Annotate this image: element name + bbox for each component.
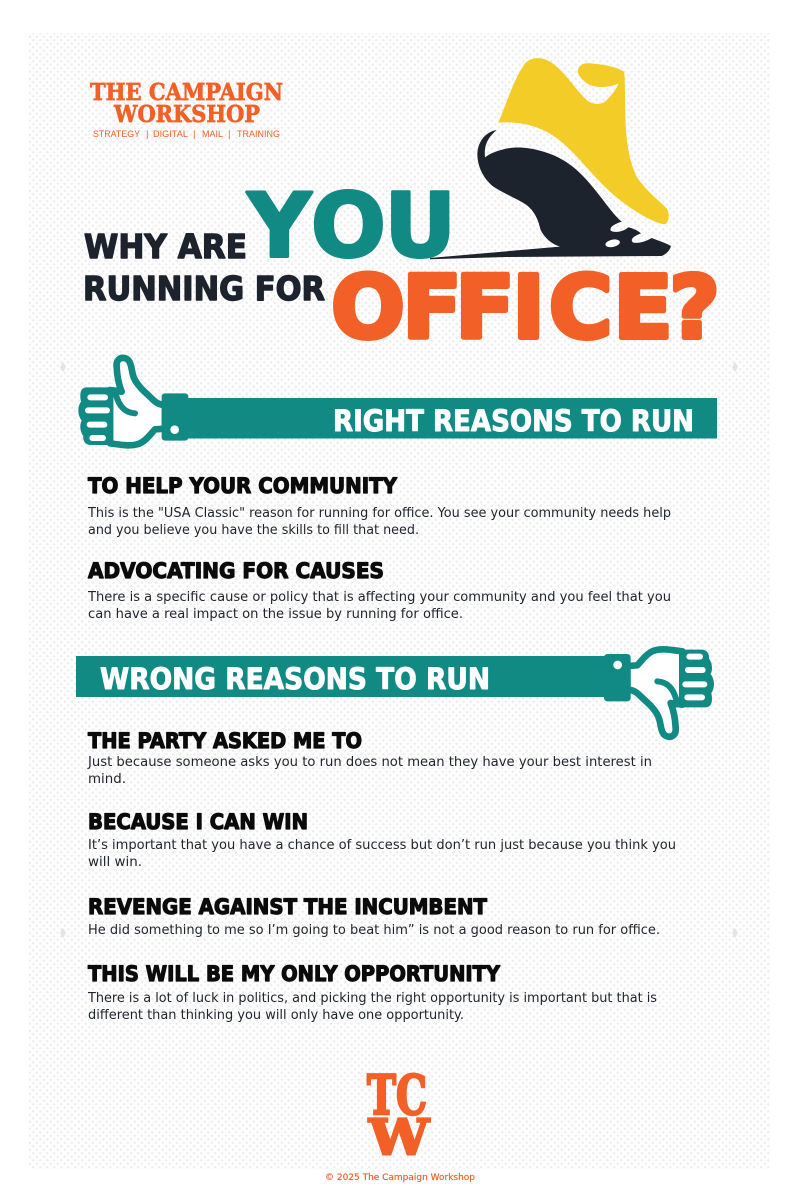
reason: advocating: There is a specific cause or policy that is affecting your community and you feel that you	[87, 590, 671, 605]
icon: running shoe	[430, 58, 671, 259]
reason: advocating: can have a real impact on the issue by running for office.	[88, 607, 463, 622]
reason: help community	[87, 474, 671, 538]
title: RUNNING FOR	[83, 269, 325, 308]
logo: The Campaign Workshop: TRAINING	[237, 129, 280, 140]
logo: The Campaign Workshop: THE CAMPAIGN	[90, 79, 283, 106]
reason: only opportunity	[87, 962, 657, 1023]
logo: The Campaign Workshop	[90, 79, 283, 140]
reason: because I can win: BECAUSE I CAN WIN	[88, 810, 308, 834]
reason: advocating: ADVOCATING FOR CAUSES	[88, 559, 384, 583]
reason: help community: This is the "USA Classic" reason for running for office. You see your community needs help	[87, 506, 671, 521]
reason: advocating	[87, 559, 671, 622]
copyright: © 2025 The Campaign Workshop	[325, 1173, 475, 1183]
section: wrong reasons	[87, 729, 676, 1023]
reason: because I can win: will win.	[88, 855, 142, 870]
reason: because I can win	[88, 810, 676, 870]
reason: help community: and you believe you have the skills to fill that need.	[88, 523, 419, 538]
icon: thumbs up	[78, 358, 188, 445]
logo: The Campaign Workshop: DIGITAL	[153, 129, 189, 140]
section: right reasons	[87, 474, 671, 622]
reason: only opportunity: THIS WILL BE MY ONLY OPPORTUNITY	[88, 962, 501, 986]
title: WHY ARE	[84, 227, 247, 266]
reason: because I can win: It’s important that you have a chance of success but don’t run just because you think you	[88, 838, 676, 853]
title: YOU	[246, 174, 456, 278]
banner: wrong reasons to run	[76, 649, 714, 737]
logo: The Campaign Workshop: WORKSHOP	[113, 101, 260, 128]
icon: thumbs down	[604, 649, 714, 737]
banner: right reasons to run	[78, 358, 717, 445]
reason: party asked: THE PARTY ASKED ME TO	[88, 729, 362, 753]
footer logo: TCW: W	[368, 1108, 430, 1166]
reason: revenge	[88, 895, 660, 938]
bar	[185, 398, 717, 438]
logo: The Campaign Workshop: MAIL	[202, 129, 224, 140]
reason: revenge: He did something to me so I’m going to beat him” is not a good reason to run for office.	[88, 923, 660, 938]
logo: The Campaign Workshop: |	[193, 129, 196, 140]
banner label: WRONG REASONS TO RUN	[100, 662, 490, 696]
bar	[76, 656, 616, 697]
reason: only opportunity: different than thinking you will only have one opportunity.	[88, 1008, 464, 1023]
footer logo: TCW: TC	[367, 1063, 427, 1127]
logo: The Campaign Workshop: |	[146, 129, 148, 140]
title	[83, 174, 720, 358]
logo: The Campaign Workshop: STRATEGY	[93, 129, 141, 140]
reason: only opportunity: There is a lot of luck in politics, and picking the right opportunity is important but that is	[87, 991, 657, 1006]
banner label: RIGHT REASONS TO RUN	[333, 404, 694, 438]
reason: revenge: REVENGE AGAINST THE INCUMBENT	[88, 895, 488, 919]
reason: party asked	[87, 729, 652, 787]
reason: party asked: Just because someone asks you to run does not mean they have your best interest in	[87, 755, 652, 770]
reason: party asked: mind.	[88, 772, 126, 787]
title: OFFICE?	[331, 258, 720, 358]
logo: The Campaign Workshop: |	[228, 129, 230, 140]
reason: help community: TO HELP YOUR COMMUNITY	[88, 474, 398, 498]
footer logo: TCW	[367, 1063, 430, 1166]
